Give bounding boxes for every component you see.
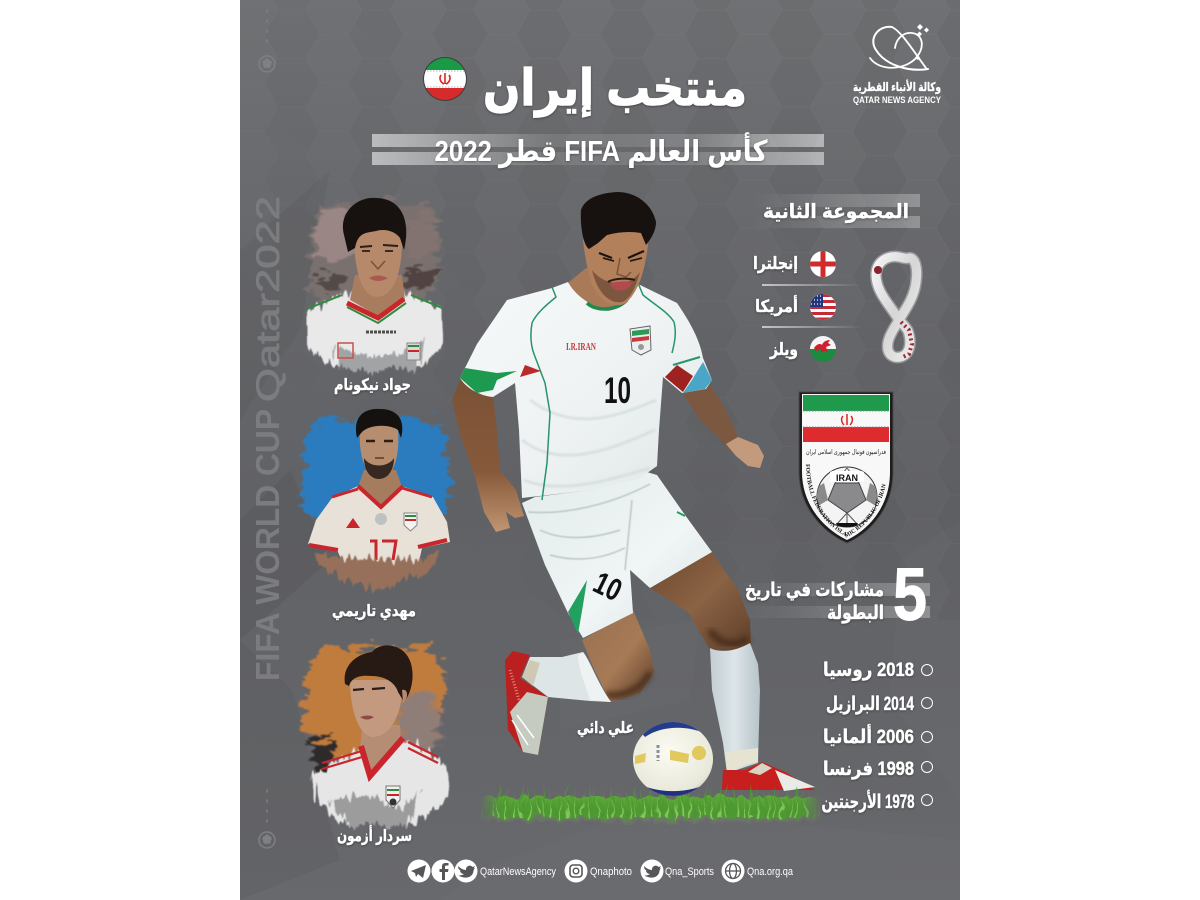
portrait: Sardar Azmoun: [304, 645, 450, 826]
player: Ali Daei: [452, 192, 815, 791]
participation list: 2018 روسيا: [823, 660, 914, 681]
group row: USA: أمريكا: [755, 295, 798, 317]
right arm: [682, 382, 746, 452]
collar: [361, 738, 403, 776]
left arm: [452, 380, 524, 532]
grass: [480, 780, 822, 823]
standing sock: [710, 643, 760, 773]
collar: [347, 299, 404, 318]
name: Ali Daei: علي دائي: [577, 720, 634, 738]
back shoe: [505, 651, 548, 755]
vertical watermark: FIFA WORLD CUP Qatar2022: [249, 196, 286, 681]
icon: Iran Football Federation crest: FOOTBALL FEDERATION ISLAMIC REPUBLIC OF IRAN: [806, 464, 886, 538]
participations: big number 5: البطولة: [827, 603, 884, 624]
back sock: [522, 652, 611, 702]
face: [360, 422, 398, 479]
title: منتخب إيران: [483, 60, 747, 118]
subtitle with stripes: [372, 132, 824, 168]
shirt seams: [531, 287, 556, 500]
logo: Qatar News Agency: QATAR NEWS AGENCY: [853, 95, 941, 105]
crest football: IRAN: [836, 473, 858, 483]
group row: USA: [755, 294, 836, 320]
shorts number: 10: [588, 565, 628, 608]
standing shoe: [722, 762, 815, 791]
head: [581, 192, 656, 305]
icon: Wales flag: [810, 336, 836, 362]
icon: twitter: [454, 860, 478, 882]
neck: [350, 275, 405, 316]
portrait: Javad Nekounam: [306, 198, 444, 370]
portrait background: [304, 648, 446, 780]
group row: Wales: [768, 336, 836, 362]
portrait background: [308, 202, 442, 312]
icon: telegram: [408, 860, 430, 882]
right hand: [726, 437, 764, 468]
name: Azmoun: سردار أزمون: [337, 825, 412, 845]
number 17: [370, 541, 396, 560]
group row: Wales: ويلز: [769, 340, 798, 360]
group row: England: [753, 251, 836, 277]
logo: Qatar News Agency: وكالة الأنباء القطرية: [853, 79, 941, 95]
shirt: [460, 282, 712, 498]
shirt marks: [338, 343, 353, 358]
social footer: QatarNewsAgency: [480, 866, 556, 878]
icon: Iran Football Federation crest: [798, 392, 894, 544]
subtitle with stripes: كأس العالم FIFA قطر 2022: [434, 132, 768, 168]
background panel: [240, 0, 960, 900]
participations: big number 5: 5: [893, 553, 927, 636]
participation list: 1978 الأرجنتين: [822, 790, 914, 813]
icon: twitter: [640, 860, 664, 882]
name: Nekounam: جواد نيكونام: [334, 377, 411, 394]
neck: [360, 725, 401, 775]
portrait background: [302, 420, 452, 538]
collar: [358, 486, 403, 507]
participation list: [822, 660, 932, 813]
icon: Iran flag: [423, 57, 467, 101]
social footer: Qnaphoto: [590, 866, 632, 878]
icon: globe: [722, 860, 744, 882]
shirt crest: [386, 786, 400, 808]
sleeve trim and armband right: [665, 365, 693, 392]
icon: facebook: [432, 860, 454, 882]
icon: instagram: [564, 860, 588, 882]
participation list: 2006 ألمانيا: [823, 724, 914, 748]
icon: Iran Football Federation crest: فدراسيون فوتبال جمهوری اسلامی ایران: [806, 449, 886, 456]
shirt: [308, 486, 450, 566]
logo: Qatar News Agency: [853, 24, 941, 105]
standing leg thigh: [650, 552, 751, 651]
shirt number: 10: [604, 370, 631, 411]
shirt: [312, 738, 450, 826]
football: [633, 722, 713, 796]
vertical watermark: FIFA WORLD CUP Qatar2022: Qatar2022: [250, 196, 286, 402]
back leg: bent thigh: [582, 610, 654, 702]
face: [350, 680, 402, 737]
group heading with stripes: [752, 194, 920, 228]
participations: big number 5: مشاركات في تاريخ: [745, 580, 884, 601]
name: Taremi: مهدي تاريمي: [332, 603, 416, 621]
shirt: [306, 288, 444, 370]
shirt crest: [404, 513, 417, 531]
social footer: Qna_Sports: [665, 866, 714, 878]
crest football: [816, 467, 878, 531]
icon: England flag: [810, 251, 836, 277]
vertical watermark: FIFA WORLD CUP Qatar2022: FIFA WORLD CUP: [249, 409, 286, 681]
icon: USA flag: [810, 294, 836, 320]
icon: World Cup 2022 emblem: [874, 257, 917, 358]
social footer: [408, 860, 794, 882]
participation list: 2014 البرازيل: [826, 694, 914, 715]
social footer: Qna.org.qa: [747, 866, 794, 878]
portrait: Mehdi Taremi: [302, 409, 452, 592]
shorts: [522, 470, 712, 638]
participation list: 1998 فرنسا: [823, 759, 914, 780]
sleeve trim left: [460, 368, 517, 393]
neck: [568, 268, 640, 314]
participations: big number 5: [737, 553, 930, 636]
group row: England: إنجلترا: [753, 254, 798, 274]
group heading with stripes: المجموعة الثانية: [763, 201, 909, 223]
shirt text and badge: I.R.IRAN: [566, 342, 597, 353]
decorative football marks on the left edge: [259, 10, 275, 848]
face: [354, 229, 402, 297]
neck: [358, 470, 402, 506]
crossed arms: [312, 550, 440, 590]
